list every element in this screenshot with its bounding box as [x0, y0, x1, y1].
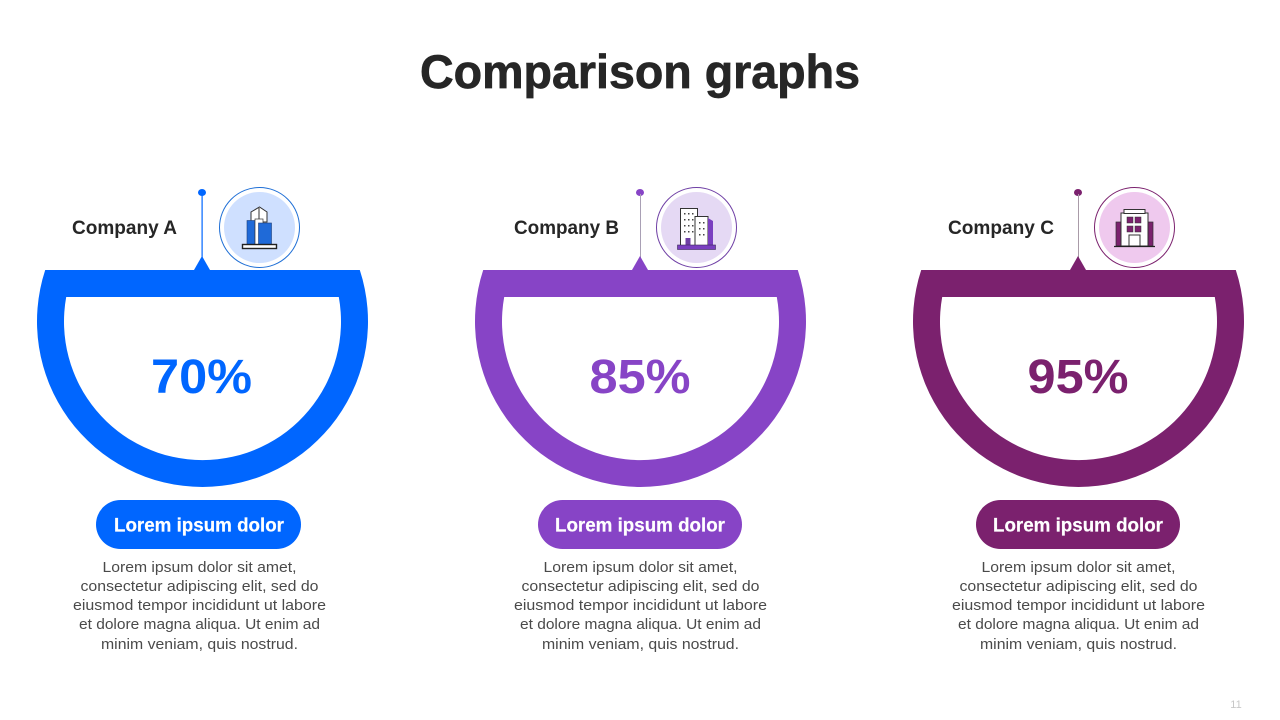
- description C: consectetur adipiscing elit, sed do: [960, 578, 1198, 595]
- description B: minim veniam, quis nostrud.: [542, 636, 739, 653]
- description A: Lorem ipsum dolor sit amet,: [102, 559, 296, 576]
- company name C: Company C: [948, 218, 1054, 239]
- percentage C: 95%: [1028, 351, 1128, 404]
- panel: Company C: [913, 188, 1244, 653]
- percentage A: 70%: [151, 351, 252, 404]
- title: Comparison graphs: [420, 45, 860, 98]
- description B: eiusmod tempor incididunt ut labore: [514, 597, 767, 614]
- pin marker A: [194, 189, 210, 270]
- description C: minim veniam, quis nostrud.: [980, 636, 1177, 653]
- icon: apartment blocks: [656, 188, 736, 268]
- semicircular gauge B: [475, 270, 806, 487]
- icon: hotel building: [1094, 188, 1174, 268]
- label pill A: Lorem ipsum dolor: [114, 516, 285, 536]
- panel: Company A: [37, 188, 368, 653]
- description A: et dolore magna aliqua. Ut enim ad: [79, 616, 320, 633]
- company name A: Company A: [72, 218, 177, 239]
- semicircular gauge A: [37, 270, 368, 487]
- page number: 11: [1230, 699, 1242, 711]
- label pill C: [976, 500, 1180, 549]
- label pill C: Lorem ipsum dolor: [993, 516, 1164, 536]
- icon: office towers: [220, 188, 300, 268]
- description A: consectetur adipiscing elit, sed do: [80, 578, 318, 595]
- pin marker C: [1070, 189, 1086, 270]
- company name B: Company B: [514, 218, 619, 239]
- description B: consectetur adipiscing elit, sed do: [522, 578, 760, 595]
- description B: et dolore magna aliqua. Ut enim ad: [520, 616, 761, 633]
- description A: minim veniam, quis nostrud.: [101, 636, 298, 653]
- panel: Company B: [475, 188, 806, 653]
- description C: Lorem ipsum dolor sit amet,: [982, 559, 1176, 576]
- description A: eiusmod tempor incididunt ut labore: [73, 597, 326, 614]
- label pill B: [538, 500, 742, 549]
- label pill B: Lorem ipsum dolor: [555, 516, 726, 536]
- description C: eiusmod tempor incididunt ut labore: [952, 597, 1205, 614]
- description C: et dolore magna aliqua. Ut enim ad: [958, 616, 1199, 633]
- label pill A: [96, 500, 301, 549]
- semicircular gauge C: [913, 270, 1244, 487]
- pin marker B: [632, 189, 648, 270]
- description B: Lorem ipsum dolor sit amet,: [544, 559, 738, 576]
- percentage B: 85%: [590, 351, 690, 404]
